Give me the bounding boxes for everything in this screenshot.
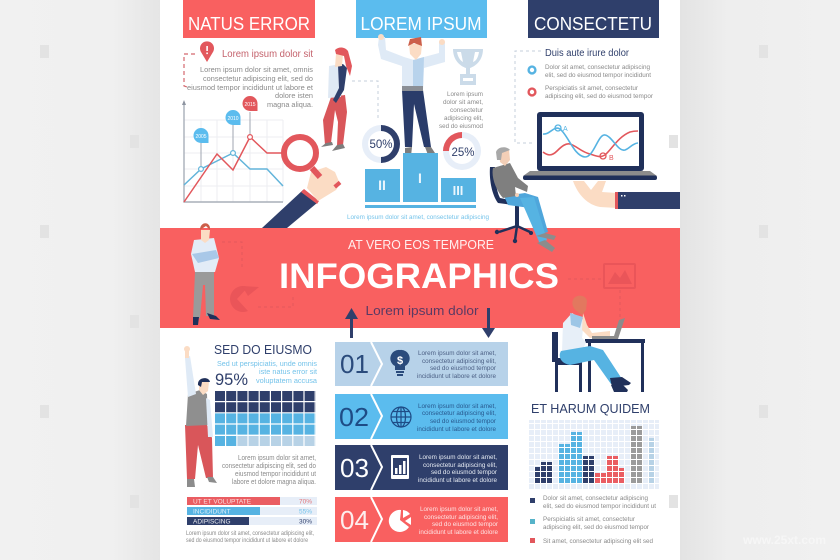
bar: adipiscing: [187, 517, 312, 526]
figure: woman standing: [321, 47, 352, 151]
step 04: Lorem ipsum dolor sit amet,: [420, 506, 498, 513]
heading: lorem ipsum: [356, 0, 487, 38]
subheading: Lorem ipsum dolor sit: [222, 49, 313, 60]
body text: [187, 67, 314, 109]
icon: faint image: [604, 264, 635, 288]
figure: woman at desk: [552, 296, 645, 392]
laptop with chart: B: [609, 155, 614, 162]
bullet two: Perspiciatis sit amet, consectetur: [545, 85, 639, 92]
bottom left caption: Lorem ipsum dolor sit amet, consectetur adipiscing elit,: [186, 531, 314, 537]
bar: incididunt: [187, 507, 312, 516]
bullet one: [529, 64, 651, 79]
line chart: [182, 96, 283, 202]
step 03: incididunt ut labore et dolore: [418, 477, 497, 484]
step 01: sed do eiusmod tempor: [430, 365, 497, 372]
podium: I: [418, 170, 422, 186]
blue text: Sed ut perspiciatis, unde omnis: [217, 361, 318, 368]
legend: navy: [530, 495, 656, 510]
step 04: sed do eiusmod tempor: [432, 521, 499, 528]
panel: natus error text: [184, 41, 314, 109]
laptop: [592, 318, 625, 339]
year marker 2010: 2010: [227, 116, 239, 122]
body text: magna aliqua.: [267, 102, 313, 109]
icon: warning pin: [200, 41, 214, 62]
text: trophy caption: dolor sit amet,: [443, 99, 483, 106]
bar: ut et voluptate: [187, 497, 312, 506]
site watermark text: www.25xt.com: [742, 533, 826, 547]
legend: blue: [530, 516, 650, 531]
bar: adipiscing: ADIPISCING: [193, 518, 231, 526]
podium: II: [378, 177, 386, 193]
heading: lorem ipsum: LOREM IPSUM: [360, 13, 482, 34]
panel: et harum quidem: [529, 401, 659, 545]
year marker 2015: 2015: [244, 102, 256, 108]
heading: ET HARUM QUIDEM: [531, 401, 650, 416]
step 02: consectetur adipiscing elit,: [422, 410, 496, 417]
waffle chart: [215, 396, 316, 441]
step 01: [335, 342, 508, 386]
icon: light bulb: [390, 350, 410, 376]
body text: consectetur adipiscing elit, sed do: [203, 76, 313, 83]
donut: 50%: 50%: [369, 139, 393, 151]
step 04: incididunt ut labore et dolore: [419, 529, 498, 536]
legend: red: Sit amet, consectetur adipiscing elit sed: [543, 538, 653, 545]
step 03: consectetur adipiscing elit,: [423, 462, 497, 469]
icon: hand with magnifier: [262, 137, 341, 228]
figure: man with crossed arms: [191, 223, 220, 325]
icon: faint pie chart: [230, 286, 259, 312]
figure: man with raised arms: [378, 34, 445, 156]
step 02: 02: [339, 402, 369, 432]
icon: light bulb: $: [397, 355, 403, 367]
heading: consectetu: [528, 0, 659, 38]
step 03: Lorem ipsum dolor sit amet,: [419, 454, 497, 461]
bottom left caption: [186, 531, 314, 544]
panel: consectetu text: [515, 48, 654, 143]
arrow: down: [482, 308, 495, 338]
text: trophy caption: adipiscing elit,: [444, 115, 483, 122]
banner caption: Lorem ipsum dolor: [366, 303, 479, 318]
banner subtitle: AT VERO EOS TEMPORE: [348, 237, 494, 252]
podium: III: [453, 183, 463, 198]
step 03: [335, 445, 508, 490]
bar: ut et voluptate: UT ET VOLUPTATE: [193, 498, 252, 506]
step 03: 03: [340, 453, 369, 483]
watermark marks: [40, 45, 768, 508]
banner decoration: dashed links: [222, 242, 620, 320]
body text: labore et dolore magna aliqua.: [232, 479, 316, 486]
legend: navy: elit, sed do eiusmod tempor incididunt ut: [543, 503, 656, 510]
bar: incididunt: 55%: [299, 508, 312, 516]
body text: eiusmod tempor incididunt ut labore et: [187, 85, 313, 92]
icon: hand holding laptop: [573, 181, 680, 209]
icon: tablet chart: [391, 455, 409, 479]
body text: eiusmod tempor incididunt ut: [235, 471, 316, 478]
text: trophy caption: consectetur: [450, 107, 484, 114]
legend: blue: Perspiciatis sit amet, consectetur: [543, 516, 636, 523]
step 02: [335, 394, 508, 439]
figure: seated man in office chair: [490, 147, 556, 252]
body text: Lorem ipsum dolor sit amet, omnis: [200, 67, 314, 74]
stat: 95%: 95%: [215, 370, 248, 389]
step 01: 01: [340, 349, 369, 379]
step 04: [335, 497, 508, 542]
bar: adipiscing: 30%: [299, 518, 312, 526]
step 04: 04: [340, 505, 369, 535]
subheading: Duis aute irure dolor: [545, 48, 630, 59]
text: trophy caption: sed do eiusmod: [439, 123, 483, 130]
bullet two: adipiscing elit, sed do eiusmod tempor: [545, 93, 654, 100]
bullet two: [529, 85, 654, 100]
laptop with chart: A: [563, 126, 568, 133]
legend: blue: adipiscing elit, sed do eiusmod tempor: [543, 524, 650, 531]
pixel bar chart: [529, 420, 659, 490]
step 01: Lorem ipsum dolor sit amet,: [418, 350, 496, 357]
heading: natus error: [183, 0, 315, 38]
panel: sed do eiusmo: [214, 342, 318, 486]
donut: 25%: [443, 132, 481, 170]
bullet one: Dolor sit amet, consectetur adipiscing: [545, 64, 650, 71]
bar chart: percentages: [187, 497, 317, 526]
step 03: sed do eiusmod tempor: [431, 469, 498, 476]
podium caption: Lorem ipsum dolor sit amet, consectetur adipiscing: [347, 214, 489, 221]
heading: SED DO EIUSMO: [214, 342, 312, 357]
blue text: [217, 361, 318, 385]
body text: consectetur adipiscing elit, sed do: [222, 463, 316, 470]
step 04: consectetur adipiscing elit,: [424, 514, 498, 521]
arrow: up: [345, 308, 358, 338]
blue text: voluptatem accusa: [256, 378, 317, 385]
bar: ut et voluptate: 70%: [299, 498, 312, 506]
banner title: INFOGRAPHICS: [279, 257, 559, 296]
step 02: incididunt ut labore et dolore: [417, 426, 496, 433]
laptop with chart: [523, 112, 657, 180]
bottom left caption: sed do eiusmod tempor incididunt ut labore et dolore: [186, 538, 309, 544]
figure: man with raised fist: [184, 346, 217, 487]
icon: globe: [391, 407, 411, 427]
bar: incididunt: INCIDIDUNT: [193, 508, 231, 516]
heading: consectetu: CONSECTETU: [534, 13, 652, 34]
heading: natus error: NATUS ERROR: [188, 13, 310, 34]
text: trophy caption: Lorem ipsum: [447, 91, 483, 98]
body: [562, 313, 586, 352]
icon: pie chart: [389, 510, 411, 532]
legend: navy: Dolor sit amet, consectetur adipiscing: [543, 495, 648, 502]
text: trophy caption: [439, 91, 484, 130]
chair: [552, 332, 582, 392]
dashed connector: woman to donut: [352, 81, 378, 120]
step 01: incididunt ut labore et dolore: [417, 373, 496, 380]
step 02: Lorem ipsum dolor sit amet,: [418, 403, 496, 410]
desk: [585, 339, 645, 392]
bullet one: elit, sed do eiusmod tempor incididunt: [545, 72, 651, 79]
body text: [222, 455, 316, 486]
blue text: iste natus error sit: [259, 369, 317, 376]
body text: Lorem ipsum dolor sit amet,: [238, 455, 316, 462]
banner: [160, 228, 680, 328]
donut: 25%: 25%: [451, 147, 475, 159]
body text: dolore isten: [275, 93, 313, 100]
podium: [365, 153, 476, 208]
year marker 2005: 2005: [195, 134, 207, 140]
step 01: consectetur adipiscing elit,: [422, 358, 496, 365]
donut: 50%: [362, 125, 400, 163]
step 02: sed do eiusmod tempor: [430, 418, 497, 425]
icon: trophy: [453, 49, 483, 85]
